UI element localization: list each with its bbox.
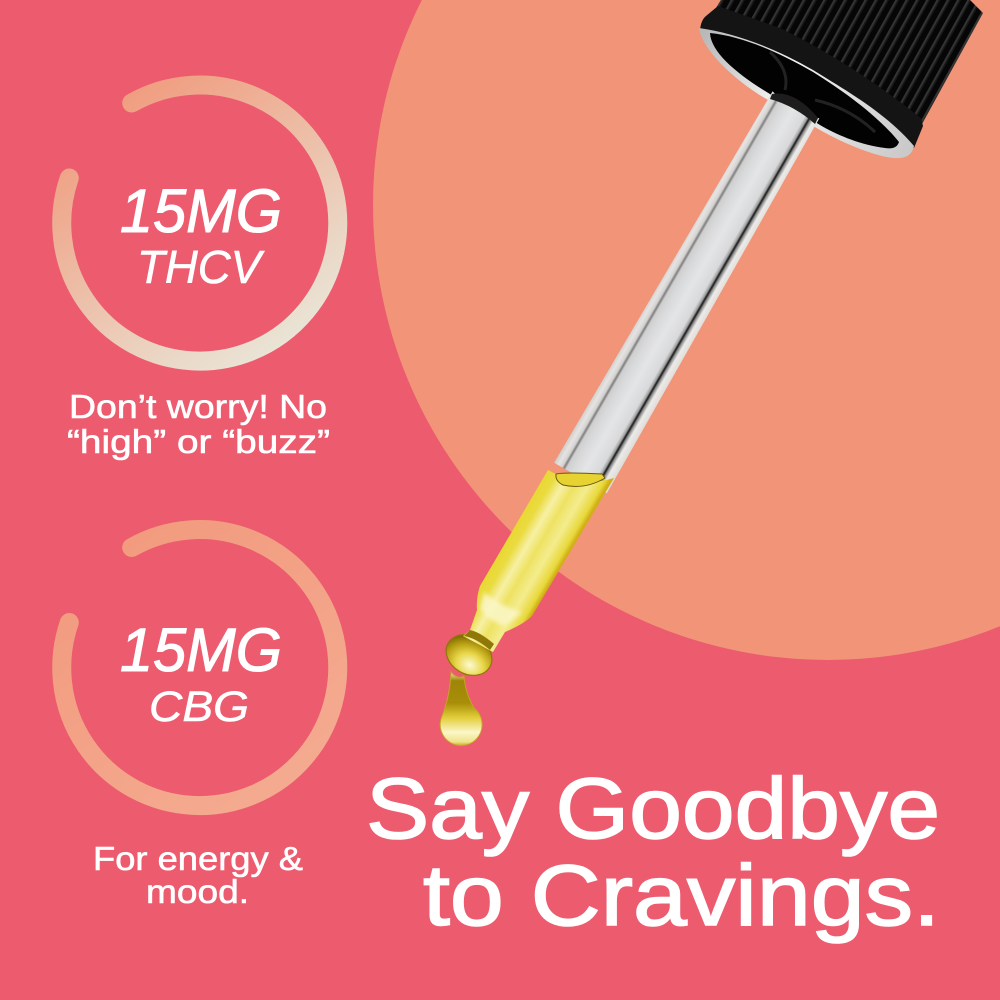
description: CBG: For energy & (93, 840, 303, 877)
stat: THCV (62, 85, 338, 460)
peach circle (373, 0, 1000, 660)
dropper cap (699, 0, 983, 158)
headline: Say Goodbye (366, 761, 940, 857)
description: THCV: “high” or “buzz” (67, 423, 330, 460)
dropper (439, 0, 983, 746)
oil drop (440, 672, 482, 746)
ring: CBG (62, 530, 338, 806)
description: CBG: mood. (146, 873, 249, 910)
glass tube (554, 90, 822, 493)
value: 15MG: 15MG (120, 616, 282, 684)
cap collar (770, 94, 818, 124)
label: THCV: THCV (137, 241, 265, 293)
glass bulb (439, 627, 499, 683)
oil meniscus (556, 473, 605, 486)
label: CBG: CBG (149, 683, 249, 731)
shoulder highlight (480, 592, 522, 626)
neck shadow (464, 630, 494, 650)
oil in tube (463, 470, 614, 652)
ring: THCV (62, 85, 338, 361)
headline: to Cravings. (423, 848, 940, 944)
description: THCV: Don’t worry! No (69, 388, 327, 425)
stat: CBG (62, 530, 338, 910)
value: 15MG: 15MG (120, 177, 282, 245)
